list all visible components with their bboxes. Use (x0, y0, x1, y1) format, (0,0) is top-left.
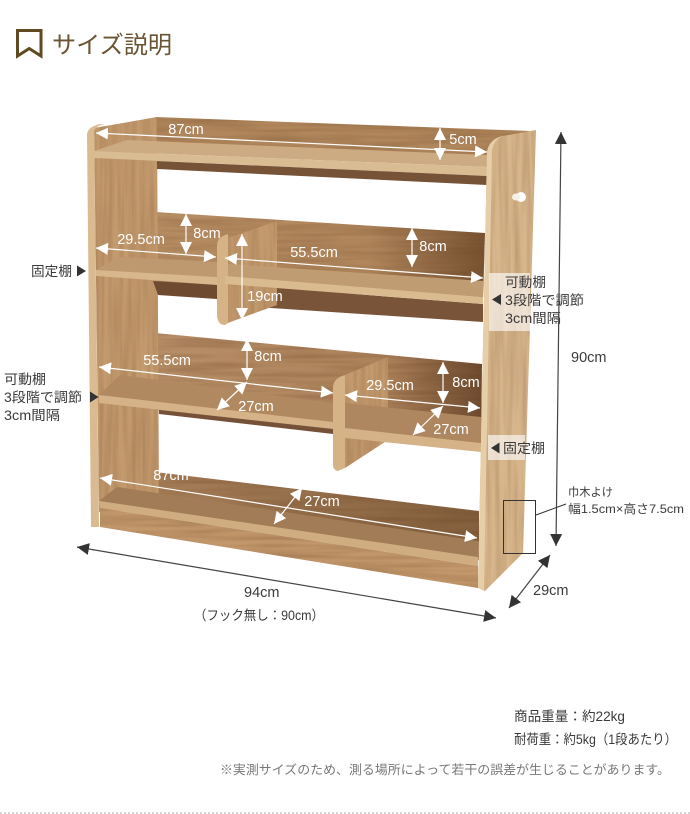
upper divider front edge (217, 234, 228, 325)
lower shelf, left part (99, 375, 333, 434)
callout: adjustable shelf left: 3cm間隔 (4, 408, 60, 423)
top shelf height 5cm (440, 128, 477, 160)
lower left height 8cm (247, 339, 282, 380)
height arrow 90cm: 90cm (571, 350, 606, 366)
back wall third tier (155, 333, 482, 445)
note: ※実測サイズのため、測る場所によって若干の誤差が生じることがあります。 (220, 762, 670, 777)
divider height 19cm (242, 234, 283, 320)
callout: adjustable shelf right: 可動棚 (505, 275, 546, 290)
icon: bookmark (18, 30, 41, 56)
lower divider front edge (333, 375, 345, 471)
depth arrow 29cm (509, 555, 568, 608)
bottom shelf width 87cm: 87cm (153, 468, 189, 484)
lower left depth 27cm (217, 382, 274, 415)
right side panel (478, 130, 536, 591)
top shelf height 5cm: 5cm (449, 132, 477, 148)
callout: fixed shelf right: 固定棚 (503, 441, 545, 456)
callout: fixed shelf left: 固定棚 (31, 264, 72, 279)
lower right width 29.5cm: 29.5cm (366, 378, 414, 394)
callout: adjustable shelf right: 3段階で調節 (505, 292, 584, 308)
load capacity: 耐荷重：約5kg（1段あたり） (514, 732, 677, 747)
top shelf width 87cm (96, 122, 487, 152)
divider height 19cm: 19cm (247, 289, 283, 305)
upper right height 8cm (412, 228, 447, 267)
callout: fixed shelf right (488, 435, 545, 460)
fixed shelf, left part (96, 257, 217, 299)
upper left width 29.5cm: 29.5cm (117, 232, 165, 248)
lower divider side (345, 357, 388, 468)
bottom shelf depth 27cm: 27cm (304, 494, 340, 510)
upper right width 55.5cm: 55.5cm (290, 245, 338, 261)
baseboard notch callout (504, 485, 684, 554)
white dimension arrows (96, 122, 487, 538)
fixed shelf underside right (225, 284, 483, 322)
wall hook (512, 192, 526, 202)
lower left depth 27cm: 27cm (238, 399, 274, 415)
width arrow 94cm (77, 547, 496, 623)
width arrow 94cm: 94cm (244, 585, 279, 601)
upper left height 8cm (186, 214, 221, 254)
baseboard notch callout: 巾木よけ (568, 485, 613, 499)
back wall bottom tier (155, 472, 479, 560)
upper right width 55.5cm (225, 245, 483, 278)
width arrow 94cm: （フック無し：90cm） (194, 608, 324, 623)
top shelf (94, 140, 487, 185)
upper left height 8cm: 8cm (193, 226, 221, 242)
back wall at top (155, 117, 530, 160)
title: サイズ説明 (52, 32, 172, 59)
bottom shelf depth 27cm (274, 488, 340, 524)
callout: adjustable shelf left: 可動棚 (4, 372, 46, 387)
left panel front edge (87, 124, 104, 527)
lower right width 29.5cm (345, 378, 480, 408)
height arrow 90cm (556, 132, 606, 546)
right panel front edge (478, 136, 503, 590)
lower right depth 27cm (413, 406, 469, 438)
callout: adjustable shelf right (489, 273, 584, 331)
top shelf width 87cm: 87cm (168, 122, 204, 138)
callout: adjustable shelf right: 3cm間隔 (505, 311, 561, 326)
product weight: 商品重量：約22kg (514, 709, 625, 724)
bottom shelf and plinth (99, 487, 479, 588)
fixed shelf, right part (225, 264, 483, 304)
lower right height 8cm: 8cm (452, 375, 480, 391)
lower right height 8cm (443, 362, 480, 403)
lower left width 55.5cm (99, 353, 333, 393)
upper divider side (222, 221, 277, 324)
bottom shelf width 87cm (100, 468, 477, 538)
left side panel inner face (94, 117, 159, 512)
back wall second tier (155, 212, 485, 300)
lower shelf, right part (345, 403, 481, 452)
lower right depth 27cm: 27cm (433, 422, 469, 438)
lower left width 55.5cm: 55.5cm (143, 353, 191, 369)
callout: adjustable shelf left (4, 372, 98, 423)
shelf unit illustration (87, 117, 536, 591)
lower left height 8cm: 8cm (254, 349, 282, 365)
callout: adjustable shelf left: 3段階で調節 (4, 389, 82, 405)
depth arrow 29cm: 29cm (533, 583, 568, 599)
upper right height 8cm: 8cm (419, 239, 447, 255)
upper left width 29.5cm (96, 232, 216, 257)
baseboard notch callout: 幅1.5cm×高さ7.5cm (568, 501, 684, 516)
